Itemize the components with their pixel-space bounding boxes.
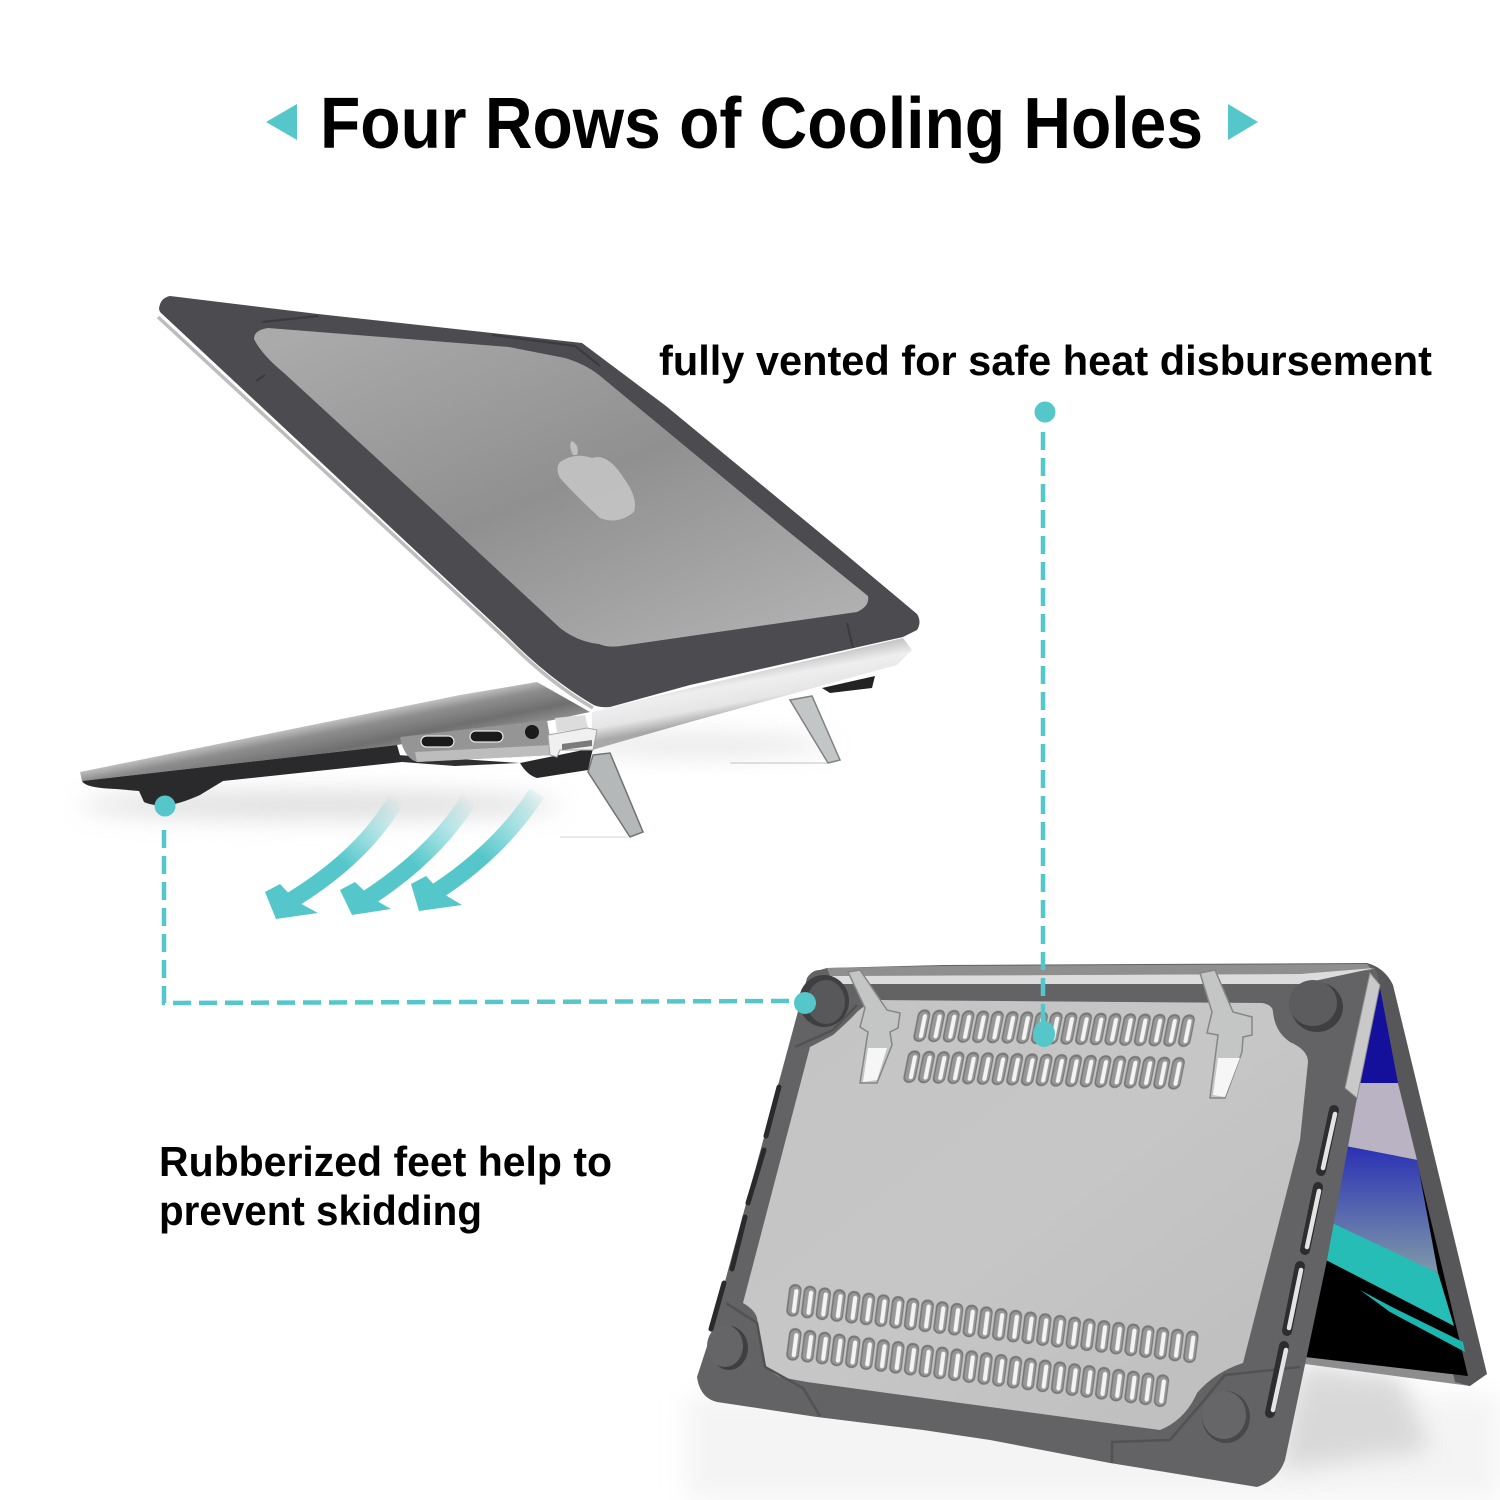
laptop shadow: raised laptop: [80, 735, 830, 837]
target dot: [1033, 1021, 1055, 1047]
top band: light strip: [832, 968, 1375, 984]
laptop base dark shell: [82, 745, 402, 806]
body inner frosted panel: [743, 1000, 1308, 1430]
vents: row 2: [901, 1050, 1187, 1090]
callout text: prevent skidding: [159, 1187, 482, 1234]
rear rubber foot: [822, 676, 875, 693]
screen display: [1305, 988, 1468, 1376]
lid outer rubber bumper: [159, 296, 920, 707]
screen band: blue gradient: [1330, 1145, 1438, 1273]
top band: grey: [827, 964, 1372, 976]
port: headphone jack: [525, 725, 539, 739]
heading text: Four Rows of Cooling Holes: [320, 84, 1203, 164]
floor shadow: open laptop: [686, 1362, 1500, 1500]
lid inner frosted panel: [254, 328, 868, 647]
base underside strip: [397, 755, 520, 766]
rubber foot: bottom right: [1202, 1391, 1250, 1443]
icon: left triangle: [266, 104, 297, 140]
screen band: lavender: [1340, 1083, 1417, 1160]
callout text: fully vented for safe heat disbursement: [659, 337, 1432, 384]
rear clear stand: [790, 696, 840, 763]
clear rear hinge section: [592, 638, 912, 750]
rubber foot: top left: [799, 975, 849, 1027]
callout dot: [1034, 402, 1056, 422]
screen band: black: [1305, 1083, 1468, 1376]
dashed leader: [164, 830, 790, 1003]
screen base edge: [1305, 1356, 1470, 1386]
side vents: left rim: [711, 1087, 779, 1329]
lid bumper ridges: [256, 316, 853, 648]
clear stand: right: [1200, 970, 1252, 1098]
callout dot: [154, 796, 176, 816]
laptop base top surface: [80, 682, 590, 781]
bumper lip lines: [726, 1005, 1300, 1463]
icon: apple logo: [558, 441, 635, 520]
front rubber foot: [520, 748, 593, 778]
target dot: [794, 992, 816, 1014]
vents: row 4: [785, 1327, 1171, 1408]
clear hinge clip: [548, 715, 597, 757]
dashed leader: [1041, 432, 1045, 1026]
laptop: raised side view with stand: [80, 296, 920, 837]
front clear stand: [588, 753, 643, 837]
port: USB-C left: [421, 736, 454, 747]
rubber foot: top right: [1289, 980, 1343, 1032]
body rubber bumper: [697, 963, 1378, 1487]
port: USB-C right: [470, 731, 503, 742]
screen band: dark blue: [1350, 988, 1398, 1083]
lid silver edge: [158, 317, 593, 708]
callout: rubberized feet: [154, 796, 816, 1234]
side vents: right rim: [1270, 1110, 1335, 1413]
vents: row 3: [785, 1283, 1201, 1364]
callout: fully vented: [659, 337, 1432, 1047]
arrow 2: [340, 798, 470, 915]
title: [266, 84, 1258, 164]
rubber foot: bottom left: [707, 1325, 748, 1370]
callout text: Rubberized feet help to: [159, 1138, 612, 1185]
screen band: thin teal stripe: [1360, 1290, 1465, 1352]
arrow 1: [265, 798, 397, 919]
arrow 3: [411, 793, 537, 911]
port panel: [400, 720, 553, 762]
clear stand: left: [848, 970, 900, 1083]
screen frame: [1367, 963, 1487, 1386]
clear hinge strip: [1345, 973, 1380, 1098]
airflow arrows: [265, 793, 537, 919]
laptop: upside-down tent view: [697, 963, 1487, 1487]
screen band: teal: [1322, 1222, 1454, 1326]
vents: row 1: [911, 1009, 1197, 1047]
icon: right triangle: [1228, 104, 1258, 140]
